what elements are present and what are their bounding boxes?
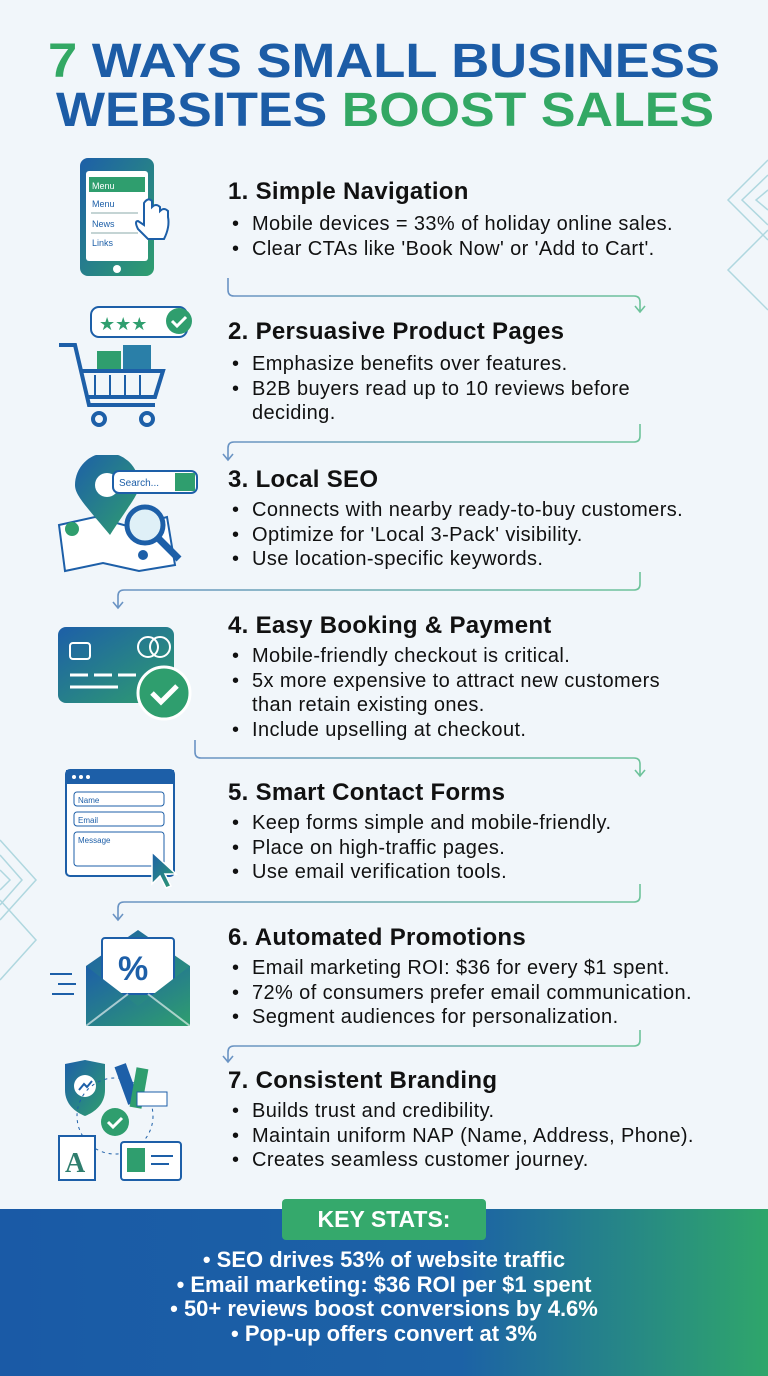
stats list: • Pop-up offers convert at 3%	[231, 1321, 537, 1346]
bullets 2: B2B buyers read up to 10 reviews before deciding.	[252, 378, 630, 424]
bullets 3: Use location-specific keywords.	[252, 548, 543, 570]
key stats label: KEY STATS:	[318, 1206, 450, 1232]
bullets 3: Optimize for 'Local 3-Pack' visibility.	[252, 524, 583, 546]
heading 7: 7. Consistent Branding	[228, 1067, 497, 1094]
title	[48, 35, 720, 137]
heading 4: 4. Easy Booking & Payment	[228, 612, 552, 639]
bullets 6	[232, 957, 692, 1028]
heading 3: 3. Local SEO	[228, 466, 378, 493]
title: 7 WAYS SMALL BUSINESS	[48, 35, 720, 88]
stats list	[170, 1247, 598, 1346]
icon: phone menu: News	[92, 219, 115, 229]
icon: credit card check	[58, 627, 192, 720]
icon: map pin search	[58, 455, 198, 572]
icon: contact form: Message	[78, 836, 111, 845]
icon: map pin search: Search...	[119, 478, 159, 489]
bullets 6: 72% of consumers prefer email communication.	[252, 982, 692, 1004]
bullets 5: Keep forms simple and mobile-friendly.	[252, 812, 611, 834]
bullets 7: Creates seamless customer journey.	[252, 1149, 589, 1171]
bullets 3	[232, 499, 683, 570]
icon: branding	[58, 1060, 182, 1181]
bullets 5: Use email verification tools.	[252, 861, 507, 883]
bullets 4	[232, 645, 660, 740]
icon: contact form: Email	[78, 816, 98, 825]
icon: phone menu: Links	[92, 238, 114, 248]
bullets 1: Mobile devices = 33% of holiday online sales.	[252, 213, 673, 235]
bullets 2	[232, 353, 630, 424]
stats list: • Email marketing: $36 ROI per $1 spent	[177, 1272, 591, 1297]
icon: contact form	[65, 769, 178, 889]
bullets 2: Emphasize benefits over features.	[252, 353, 568, 375]
bullets 7: Maintain uniform NAP (Name, Address, Phone).	[252, 1124, 694, 1146]
icon: email promo	[50, 930, 190, 1026]
icon: branding: A	[65, 1148, 86, 1179]
bullets 1: Clear CTAs like 'Book Now' or 'Add to Cart'.	[252, 238, 655, 260]
title: WEBSITES BOOST SALES	[56, 84, 714, 137]
bullets 4: Mobile-friendly checkout is critical.	[252, 645, 570, 667]
heading 5: 5. Smart Contact Forms	[228, 779, 505, 806]
bullets 1	[232, 213, 673, 260]
icon: shopping cart with rating	[59, 306, 192, 427]
icon: phone menu: Menu	[92, 181, 115, 191]
icon: contact form: Name	[78, 796, 100, 805]
bullets 7	[232, 1100, 694, 1171]
icon: email promo: %	[118, 950, 148, 988]
heading 2: 2. Persuasive Product Pages	[228, 318, 564, 345]
stats list: • 50+ reviews boost conversions by 4.6%	[170, 1296, 598, 1321]
bullets 5	[232, 812, 611, 883]
stats list: • SEO drives 53% of website traffic	[203, 1247, 565, 1272]
icon: shopping cart with rating: ★★★	[99, 314, 147, 334]
heading 6: 6. Automated Promotions	[228, 924, 526, 951]
bullets 5: Place on high-traffic pages.	[252, 836, 505, 858]
heading 1: 1. Simple Navigation	[228, 178, 469, 205]
icon: phone menu	[80, 158, 170, 276]
bullets 7: Builds trust and credibility.	[252, 1100, 494, 1122]
bullets 4: Include upselling at checkout.	[252, 718, 526, 740]
bullets 6: Segment audiences for personalization.	[252, 1006, 619, 1028]
bullets 3: Connects with nearby ready-to-buy customers.	[252, 499, 683, 521]
panel: key stats banner	[0, 1209, 768, 1376]
icon: phone menu: Menu	[92, 199, 115, 209]
key stats label	[282, 1199, 486, 1240]
bullets 4: 5x more expensive to attract new customers than retain existing ones.	[252, 670, 660, 716]
bullets 6: Email marketing ROI: $36 for every $1 spent.	[252, 957, 670, 979]
